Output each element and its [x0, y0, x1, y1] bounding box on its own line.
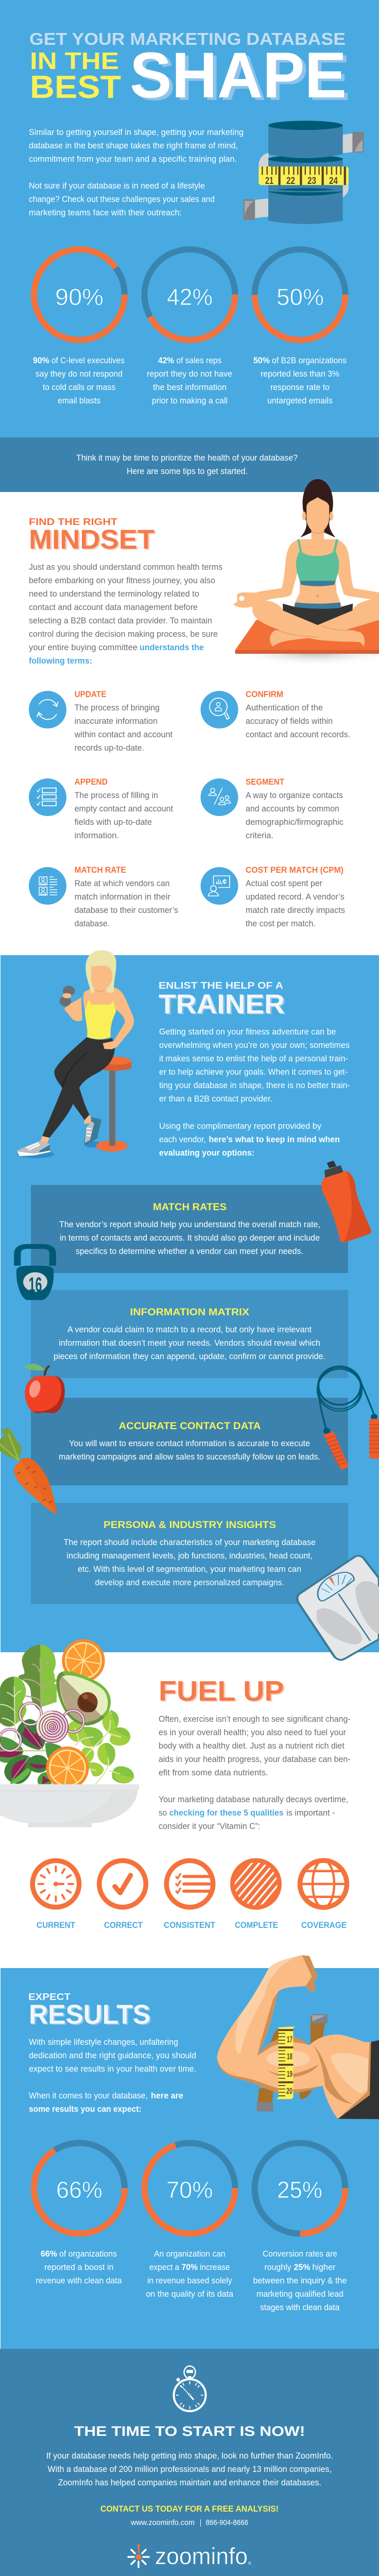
text: trainer intro: er than a B2B contact provider.: [159, 1094, 272, 1104]
term: confirm: Authentication of the: [246, 703, 323, 713]
term: confirm: accuracy of fields within: [246, 717, 333, 726]
text: mindset intro: Just as you should understand common health terms: [29, 563, 222, 572]
icon: jump rope: [317, 1366, 379, 1470]
term: segment: A way to organize contacts: [246, 791, 343, 800]
logo: zoominfo: ®: [248, 2561, 251, 2566]
caption: 90%: [33, 356, 125, 405]
title: [29, 29, 350, 114]
panel: dark transition band: [0, 437, 379, 492]
text: call to action: [46, 2451, 333, 2487]
icon: weighing scale: [297, 1556, 379, 1660]
intro text: [29, 128, 244, 217]
panel: dark transition band: Think it may be time to prioritize the health of your database?: [76, 453, 298, 463]
heading: fuel up: FUEL UP: [159, 1675, 284, 1707]
title: GET YOUR MARKETING DATABASE: [29, 29, 346, 48]
icon: current clock: CURRENT: [37, 1921, 75, 1930]
text: mindset intro: your entire buying committee: [29, 643, 137, 652]
panel: persona and industry insights: develop and execute more personalized campaigns.: [95, 1578, 284, 1587]
intro text: database in the best shape takes the right frame of mind,: [29, 141, 238, 150]
text: mindset intro: contact and account data management before: [29, 603, 198, 612]
term: segment: demographic/firmographic: [246, 818, 343, 827]
logo: zoominfo: zoominfo: [155, 2543, 248, 2569]
caption: 66%: 66%: [41, 2249, 57, 2259]
title: BEST: [30, 70, 121, 105]
term: confirm: contact and account records.: [246, 730, 350, 739]
caption: 70%: increase: [200, 2263, 230, 2272]
text: mindset intro: selecting a B2B contact data provider. To maintain: [29, 616, 212, 625]
caption: 70%: 70%: [181, 2263, 198, 2272]
text: results intro: expect to see results in your health over time.: [29, 2064, 196, 2074]
icon: database cylinder with measuring tape: 23: [307, 176, 316, 187]
text: trainer intro: it makes sense to enlist the help of a personal train-: [159, 1054, 348, 1063]
title: SHAPE: [133, 42, 350, 114]
term: update: inaccurate information: [75, 717, 158, 726]
caption: 90%: to cold calls or mass: [43, 383, 115, 392]
chart: 66% ring: [34, 2143, 125, 2234]
term: append: APPEND: [75, 777, 108, 787]
chart: 50% ring: 50%: [277, 284, 324, 310]
caption: 25%: higher: [312, 2263, 336, 2272]
term: cost per match: match rate directly impacts: [246, 906, 345, 915]
panel: match rates: specifics to determine whether a vendor can meet your needs.: [76, 1247, 303, 1256]
caption: 66%: [36, 2249, 122, 2285]
icon: coverage globe: [300, 1860, 347, 1930]
text: mindset intro: [29, 563, 222, 666]
term: segment: [201, 777, 343, 840]
text: trainer intro: ting your database in shape, there is no better train-: [159, 1081, 350, 1090]
illustration: salad bowl: [0, 1639, 139, 1827]
illustration: flexed arm with tape: 20: [286, 2086, 292, 2096]
term: update: within contact and account: [74, 730, 173, 739]
text: results intro: When it comes to your database,: [29, 2091, 148, 2100]
caption: 25%: between the inquiry & the: [253, 2276, 347, 2285]
icon: database cylinder with measuring tape: 24: [329, 176, 338, 187]
chart: 25% ring: 25%: [277, 2177, 322, 2203]
heading: results: RESULTS: [29, 1999, 150, 2030]
text: trainer intro: evaluating your options:: [159, 1148, 254, 1158]
icon: apple: [24, 1364, 65, 1413]
caption: 42%: the best information: [153, 383, 227, 392]
panel: hero background: [0, 0, 379, 437]
chart: 70% ring: 70%: [166, 2177, 213, 2203]
title: IN THE: [30, 47, 119, 74]
heading: results: RESULTS: [30, 2001, 152, 2031]
intro text: commitment from your team and a specific training plan.: [29, 155, 237, 164]
illustration: flexed arm with tape: 18: [287, 2052, 292, 2061]
icon: coverage globe: COVERAGE: [301, 1921, 347, 1930]
caption: 90%: email blasts: [58, 396, 100, 405]
text: fuel up: body with a healthy diet. Just as a nutrient rich diet: [159, 1741, 344, 1751]
heading: trainer: ENLIST THE HELP OF A: [159, 980, 283, 991]
caption: 25%: 25%: [294, 2263, 311, 2272]
text: trainer intro: each vendor,: [159, 1135, 206, 1144]
term: append: The process of filling in: [75, 791, 158, 800]
caption: 42%: [147, 356, 232, 405]
icon: current clock: [32, 1861, 79, 1930]
icon: consistent checklist: CONSISTENT: [164, 1921, 215, 1930]
text: mindset intro: control during the decision making process, be sure: [29, 630, 218, 639]
caption: 70%: [146, 2249, 234, 2299]
caption: 42%: 42%: [158, 356, 174, 365]
text: mindset intro: following terms:: [29, 656, 92, 666]
text: contact details: CONTACT US TODAY FOR A FREE ANALYSIS!: [100, 2504, 279, 2514]
panel: persona and industry insights: etc. With this level of segmentation, your marketing team can: [78, 1565, 301, 1574]
caption: 50%: response rate to: [270, 383, 330, 392]
icon: stopwatch: [174, 2366, 206, 2411]
panel: results section background: [1, 1968, 379, 2349]
term: cost per match: the cost per match.: [246, 919, 316, 928]
caption: 70%: on the quality of its data: [146, 2290, 234, 2299]
term: match rate: database to their customer’s: [75, 906, 178, 915]
caption: 50%: of B2B organizations: [272, 356, 347, 365]
caption: 25%: [253, 2249, 347, 2312]
term: append: empty contact and account: [75, 804, 173, 814]
text: fuel up: so: [159, 1808, 167, 1818]
panel: information matrix: A vendor could claim to match to a record, but only have irrelevant: [67, 1325, 312, 1334]
term: append: fields with up-to-date: [75, 818, 152, 827]
term: segment: SEGMENT: [246, 777, 284, 787]
caption: 50%: 50%: [253, 356, 270, 365]
caption: 66%: of organizations: [59, 2249, 117, 2259]
title: SHAPE: [130, 40, 347, 111]
caption: 42%: of sales reps: [176, 356, 221, 365]
heading: mindset: MINDSET: [29, 524, 154, 555]
text: fuel up: efit from some data nutrients.: [159, 1768, 268, 1777]
term: confirm: [201, 690, 350, 739]
term: update: records up-to-date.: [75, 743, 144, 753]
icon: database cylinder with measuring tape: 22: [286, 176, 295, 187]
intro text: change? Check out these challenges your sales and: [29, 195, 215, 204]
panel: match rates: in terms of contacts and accounts. It should also go deeper and include: [60, 1233, 320, 1243]
caption: 25%: stages with clean data: [260, 2303, 340, 2312]
term: match rate: Rate at which vendors can: [75, 879, 170, 888]
chart: 42% ring: [144, 249, 235, 340]
icon: carrot: [0, 1428, 57, 1514]
term: confirm: CONFIRM: [246, 690, 283, 699]
text: fuel up: es in your overall health; you also need to fuel your: [159, 1728, 346, 1737]
text: fuel up: Your marketing database naturally decays overtime,: [159, 1795, 348, 1804]
text: fuel up: consider it your “Vitamin C”:: [159, 1822, 261, 1831]
illustration: trainer woman on stool: [17, 950, 134, 1158]
panel: information matrix: pieces of information they can append, update, confirm or cannot provide.: [54, 1352, 325, 1361]
illustration: flexed arm with tape: 17: [287, 2035, 292, 2044]
term: match rate: match information in their: [75, 892, 171, 902]
heading: fuel up: FUEL UP: [160, 1676, 285, 1708]
term: match rate: [29, 866, 178, 928]
text: trainer intro: here’s what to keep in mind when: [209, 1135, 340, 1144]
text: fuel up: [159, 1715, 351, 1831]
icon: kettlebell: 16: [29, 1274, 42, 1296]
panel: information matrix: information that doesn’t meet your needs. Vendors should reveal which: [59, 1338, 320, 1348]
text: contact details: [100, 2504, 279, 2527]
text: fuel up: Often, exercise isn’t enough to see significant chang-: [159, 1715, 351, 1724]
panel: match rates: [31, 1185, 348, 1273]
panel: call to action background: [0, 2349, 379, 2576]
text: trainer intro: Getting started on your fitness adventure can be: [159, 1027, 336, 1037]
illustration: woman in yoga pose: [230, 479, 379, 669]
chart: 90% ring: 90%: [55, 284, 104, 310]
intro text: marketing teams face with their outreach:: [29, 208, 182, 217]
caption: 25%: marketing qualified lead: [256, 2290, 343, 2299]
panel: information matrix: INFORMATION MATRIX: [130, 1307, 249, 1318]
heading: call to action: THE TIME TO START IS NOW!: [74, 2424, 305, 2439]
term: cost per match: ¢: [222, 877, 227, 886]
icon: correct check: [99, 1861, 146, 1930]
caption: 50%: reported less than 3%: [261, 369, 339, 379]
text: mindset intro: understands the: [140, 643, 204, 652]
text: call to action: If your database needs help getting into shape, look no further than ZoomInfo.: [46, 2451, 333, 2461]
text: trainer intro: Using the complimentary report provided by: [159, 1122, 322, 1131]
panel: persona and industry insights: including management levels, job functions, industries, head count,: [67, 1551, 313, 1561]
heading: mindset: MINDSET: [30, 526, 156, 556]
term: update: The process of bringing: [75, 703, 160, 713]
icon: water bottle: [321, 1161, 371, 1243]
term: update: [29, 690, 173, 753]
text: fuel up: aids in your health progress, your database can ben-: [159, 1755, 351, 1764]
panel: persona and industry insights: [31, 1503, 348, 1604]
heading: trainer: TRAINER: [160, 990, 286, 1021]
caption: 25%: Conversion rates are: [263, 2249, 337, 2259]
caption: 70%: expect a: [149, 2263, 180, 2272]
caption: 50%: untargeted emails: [267, 396, 333, 405]
panel: accurate contact data: marketing campaigns and allow sales to successfully follow up on leads.: [59, 1452, 320, 1462]
text: call to action: ZoomInfo has helped companies maintain and enhance their databases.: [58, 2478, 321, 2487]
term: cost per match: Actual cost spent per: [246, 879, 322, 888]
text: results intro: [29, 2038, 196, 2114]
text: fuel up: checking for these 5 qualities: [169, 1808, 284, 1818]
panel: trainer section background: [1, 955, 379, 1652]
caption: 70%: in revenue based solely: [147, 2276, 232, 2285]
illustration: flexed arm with tape: [217, 1955, 379, 2119]
text: trainer intro: [159, 1027, 350, 1158]
icon: kettlebell: [16, 1246, 54, 1300]
caption: 70%: An organization can: [154, 2249, 226, 2259]
caption: 66%: revenue with clean data: [36, 2276, 122, 2285]
caption: 50%: [253, 356, 347, 405]
term: match rate: MATCH RATE: [75, 866, 126, 875]
text: call to action: With a database of 200 million professionals and nearly 13 million companies,: [47, 2465, 332, 2474]
text: results intro: some results you can expect:: [29, 2105, 142, 2114]
icon: database cylinder with measuring tape: 21: [265, 176, 273, 187]
caption: 66%: reported a boost in: [44, 2263, 114, 2272]
panel: accurate contact data: ACCURATE CONTACT DATA: [118, 1421, 261, 1432]
text: results intro: dedication and the right guidance, you should: [29, 2051, 196, 2060]
text: results intro: here are: [151, 2091, 183, 2100]
chart: 70% ring: [144, 2143, 235, 2234]
text: trainer intro: overwhelming when you’re on your own; sometimes: [159, 1041, 350, 1050]
panel: match rates: MATCH RATES: [153, 1202, 227, 1213]
panel: accurate contact data: [31, 1398, 348, 1485]
caption: 42%: prior to making a call: [152, 396, 228, 405]
panel: match rates: The vendor’s report should help you understand the overall match rate,: [59, 1220, 320, 1229]
text: mindset intro: before embarking on your fitness journey, you also: [29, 576, 215, 585]
term: cost per match: [201, 866, 345, 928]
chart: 66% ring: 66%: [56, 2177, 102, 2203]
chart: 50% ring: [254, 249, 345, 340]
panel: persona and industry insights: PERSONA & INDUSTRY INSIGHTS: [104, 1520, 276, 1531]
icon: complete hatch: [230, 1858, 282, 1928]
term: update: UPDATE: [75, 690, 107, 699]
heading: mindset: FIND THE RIGHT: [29, 516, 118, 527]
text: trainer intro: er to help achieve your goals. When it comes to get-: [159, 1067, 348, 1077]
chart: 42% ring: 42%: [167, 284, 213, 310]
term: match rate: database.: [75, 919, 110, 928]
chart: 90% ring: [34, 249, 125, 340]
text: results intro: With simple lifestyle changes, unfaltering: [29, 2038, 178, 2047]
text: contact details: www.zoominfo.com: [130, 2518, 195, 2527]
term: append: information.: [75, 831, 119, 840]
text: mindset intro: need to understand the terminology related to: [29, 589, 199, 599]
term: segment: criteria.: [246, 831, 273, 840]
heading: trainer: TRAINER: [159, 989, 285, 1020]
icon: database cylinder with measuring tape: [244, 121, 364, 224]
caption: 90%: 90%: [33, 356, 49, 365]
icon: consistent checklist: [164, 1861, 215, 1930]
text: contact details: 866-904-8666: [206, 2518, 248, 2527]
icon: correct check: CORRECT: [104, 1921, 143, 1930]
chart: 25% ring: [254, 2143, 345, 2234]
caption: 90%: of C-level executives: [51, 356, 125, 365]
intro text: Not sure if your database is in need of a lifestyle: [29, 181, 205, 191]
term: cost per match: COST PER MATCH (CPM): [246, 866, 343, 875]
panel: accurate contact data: You will want to ensure contact information is accurate to execute: [69, 1439, 310, 1448]
heading: results: EXPECT: [28, 1991, 71, 2002]
text: fuel up: is important -: [286, 1808, 335, 1818]
caption: 90%: say they do not respond: [36, 369, 123, 379]
panel: persona and industry insights: The report should include characteristics of your marketing database: [64, 1538, 316, 1547]
panel: dark transition band: Here are some tips to get started.: [127, 467, 248, 476]
panel: information matrix: [31, 1290, 348, 1378]
intro text: Similar to getting yourself in shape, getting your marketing: [29, 128, 244, 137]
caption: 42%: report they do not have: [147, 369, 232, 379]
caption: 25%: roughly: [265, 2263, 291, 2272]
illustration: flexed arm with tape: 19: [287, 2069, 292, 2079]
term: append: [29, 777, 173, 840]
term: segment: and accounts by common: [246, 804, 339, 814]
term: cost per match: updated record. A vendor’s: [246, 892, 344, 902]
icon: complete hatch: COMPLETE: [235, 1921, 278, 1930]
